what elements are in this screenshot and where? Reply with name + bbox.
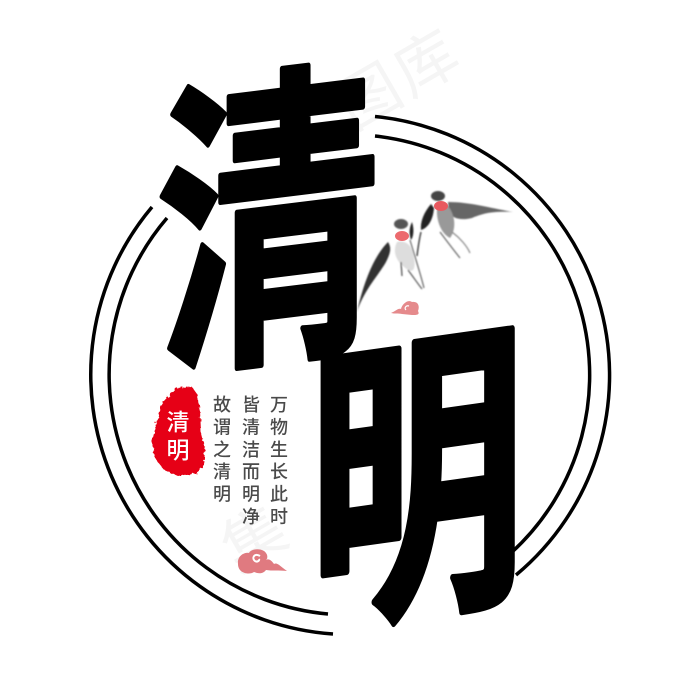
red seal: 明 (166, 437, 190, 463)
column 2: 而 (242, 462, 260, 482)
watermark (211, 19, 471, 586)
column 1: 时 (270, 507, 288, 527)
column 2 (242, 395, 260, 527)
column 1: 万 (270, 395, 288, 415)
column 3 (213, 395, 231, 504)
column 1: 生 (270, 440, 288, 460)
column 2: 洁 (242, 440, 260, 460)
large calligraphy: 明: 明 (308, 219, 525, 695)
column 3: 清 (213, 462, 231, 482)
column 2: 清 (242, 418, 260, 438)
watermark: 图 (326, 52, 414, 143)
red seal: 清 (166, 409, 190, 435)
column 2: 皆 (242, 395, 260, 415)
watermark: 库 (383, 19, 471, 110)
column 2: 净 (242, 507, 260, 527)
icon: small auspicious cloud (391, 301, 419, 315)
column 1 (270, 395, 288, 527)
column 2: 明 (242, 484, 260, 504)
column 3: 故 (213, 395, 231, 415)
watermark: 集 (211, 495, 299, 586)
double circle frame (91, 116, 610, 634)
red seal (152, 387, 205, 476)
column 1: 此 (270, 484, 288, 504)
icon: large auspicious cloud (238, 549, 287, 573)
column 3: 明 (213, 484, 231, 504)
column 3: 之 (213, 440, 231, 460)
vertical poem text (213, 395, 288, 527)
icon: swallow right (417, 191, 513, 258)
column 3: 谓 (213, 418, 231, 438)
column 1: 物 (270, 418, 288, 438)
column 1: 长 (270, 462, 288, 482)
icon: swallow left (357, 219, 424, 312)
